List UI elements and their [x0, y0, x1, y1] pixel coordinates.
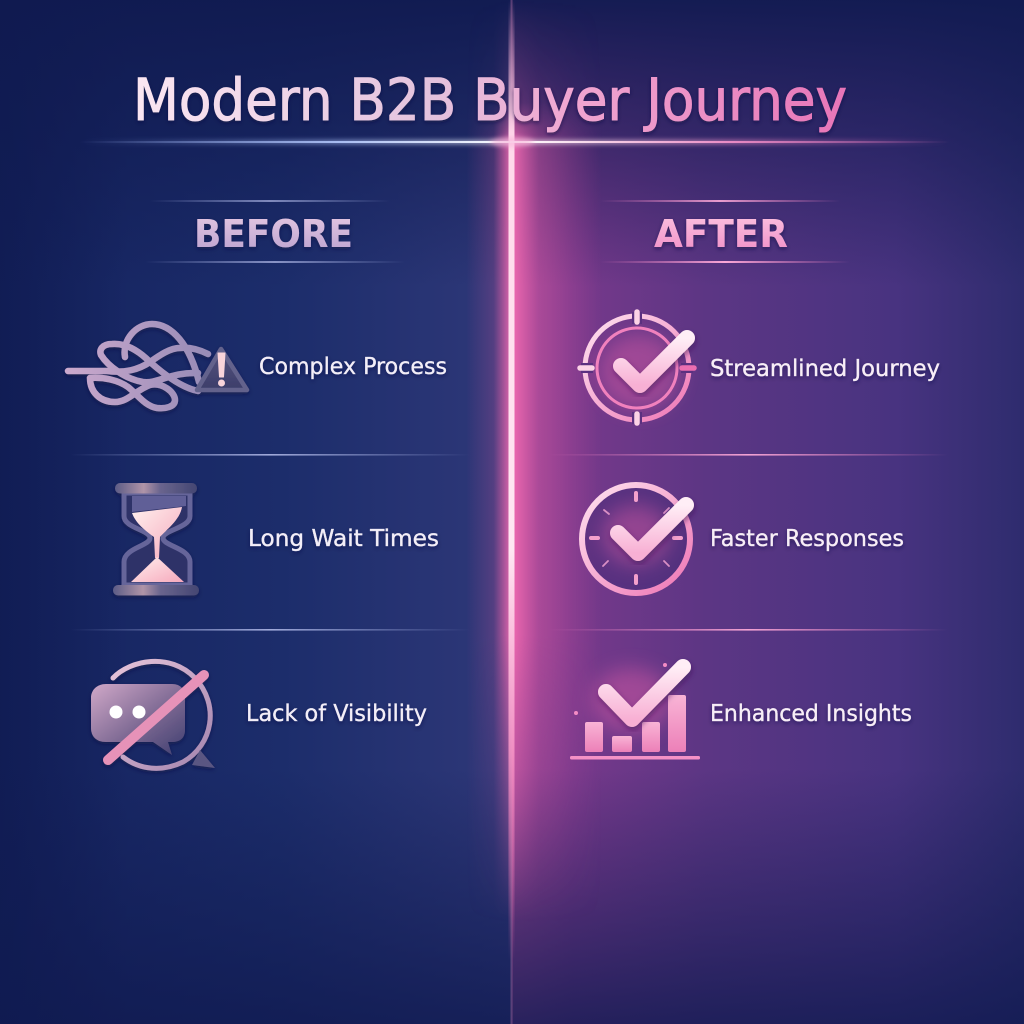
label: complex process: Complex Process — [259, 354, 447, 380]
title underline — [80, 137, 950, 147]
icon: tangled process with warning — [68, 324, 247, 408]
title: Modern B2B Buyer Journey — [133, 66, 847, 134]
label: lack of visibility: Lack of Visibility — [246, 701, 427, 727]
label: enhanced insights: Enhanced Insights — [710, 701, 912, 727]
row dividers — [70, 454, 948, 631]
central glowing divider — [472, 0, 593, 1024]
icon: bar chart check — [570, 663, 700, 760]
label: faster responses: Faster Responses — [710, 526, 904, 552]
label: long wait times: Long Wait Times — [248, 526, 439, 552]
heading: after: AFTER — [654, 212, 788, 256]
label: streamlined journey: Streamlined Journey — [710, 356, 940, 382]
icon: target check — [580, 312, 694, 424]
icon: blocked chat — [91, 661, 215, 768]
icon: hourglass — [113, 483, 199, 596]
icon: clock check — [582, 485, 690, 593]
heading: before: BEFORE — [194, 212, 353, 256]
